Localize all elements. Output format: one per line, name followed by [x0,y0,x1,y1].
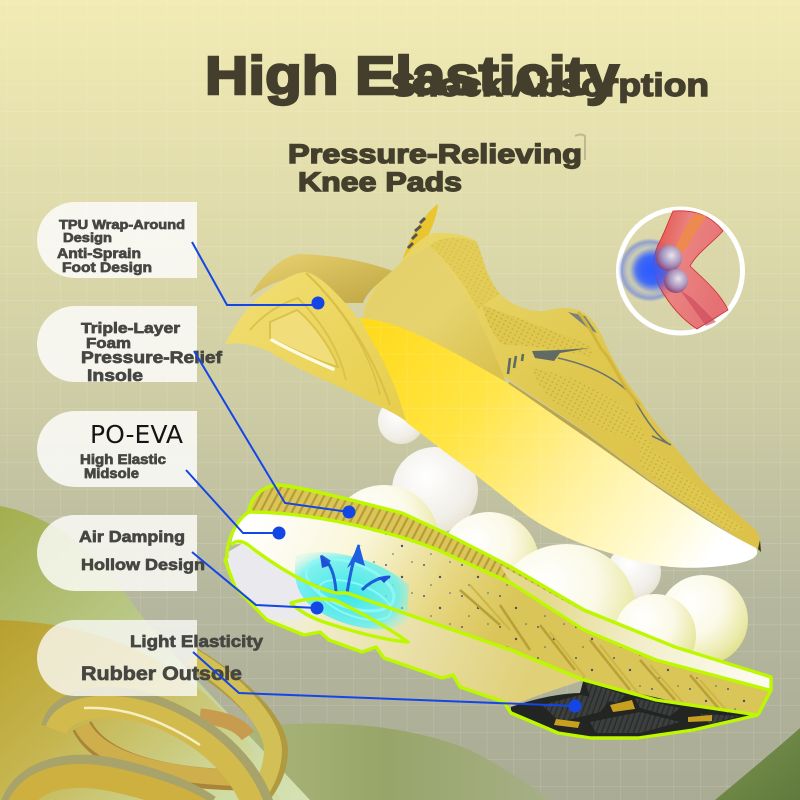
heel strap [249,254,395,303]
panel: triple-layer insole: Pressure-Relief [81,349,223,367]
panel: PO-EVA midsole [37,411,197,487]
title: High Elasticity [205,46,619,106]
upper body [363,233,761,552]
knee icon [618,209,742,333]
panel: rubber outsole [37,620,264,696]
cyan air unit [295,552,409,629]
panel: air damping [37,515,205,591]
panel: rubber outsole: Light Elasticity [130,632,264,651]
heel panel [363,246,508,388]
panel: TPU wrap-around: TPU Wrap-Around [59,217,185,232]
panel: triple-layer insole: Triple-Layer [81,320,180,337]
outer lower layer [227,543,584,706]
midsole layer [231,512,769,714]
panel: PO-EVA midsole: Midsole [84,466,140,481]
panel: triple-layer insole [37,306,223,385]
panel: PO-EVA midsole: PO-EVA [90,420,183,449]
pull tab [403,204,438,258]
leader line: insole [194,351,356,518]
panel: TPU wrap-around: Anti-Sprain [57,245,141,261]
yellow midsole wedge [359,318,757,568]
heading: knee pads: Pressure-Relieving [288,139,582,169]
sole-edge shade [508,384,740,544]
exploded sole [225,485,771,740]
bottom-left decorative hills [0,506,800,800]
panel: PO-EVA midsole: High Elastic [80,452,167,467]
panel: triple-layer insole: Foam [86,335,131,352]
leader line: air damping [192,552,324,614]
shoe upper [363,204,761,552]
leader line: midsole [186,470,286,540]
leader line: outsole [193,652,582,712]
heel cup [225,272,406,421]
insole layer [249,485,771,690]
collar knit [430,238,500,310]
panel: air damping: Air Damping [79,529,185,546]
panel: rubber outsole: Rubber Outsole [81,663,242,685]
panel: TPU wrap-around: Design [63,230,112,245]
panel: TPU wrap-around: Foot Design [62,259,152,275]
mesh panels [482,305,596,358]
blue arrows [321,545,390,593]
outsole [511,678,758,740]
panel: triple-layer insole: Insole [87,367,143,385]
heading: knee pads [288,139,582,197]
neon outlines [225,485,771,738]
subtitle: shock absorption: Shock Absorption [391,67,709,103]
blue core over knee [631,246,679,294]
panel: TPU wrap-around [37,202,197,278]
thigh and shin [654,211,728,329]
heading: knee pads: Knee Pads [298,167,462,197]
joints [656,245,682,271]
panel: air damping: Hollow Design [81,557,205,574]
blue glow [618,238,682,302]
leader line: TPU [192,242,324,310]
faint mark beside heading [575,134,585,160]
spheres [329,398,748,676]
spring coil [14,657,277,800]
grey stripes [532,348,590,361]
